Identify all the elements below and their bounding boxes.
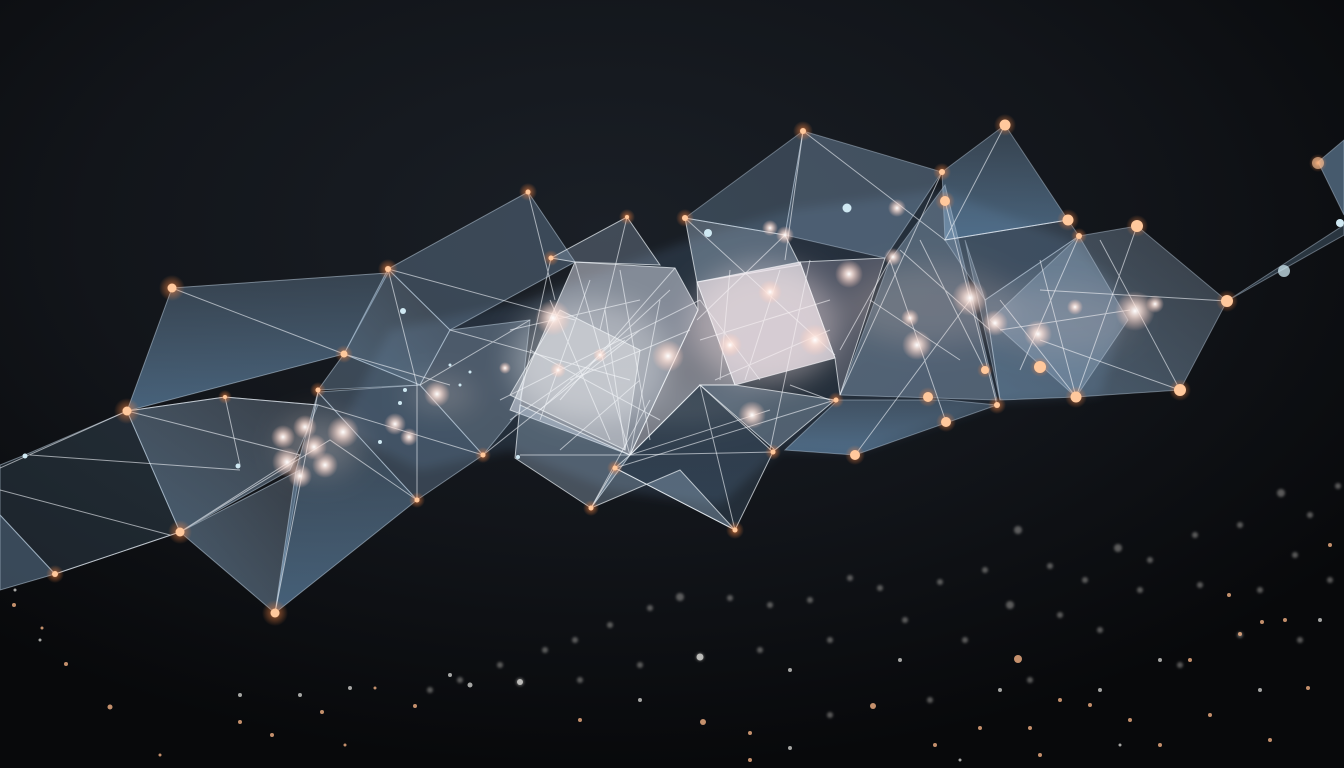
orange glowing nodes [46, 114, 1327, 626]
polygon mesh: right section [685, 125, 1344, 455]
polygon mesh: centre section [510, 217, 885, 530]
bottom particle field [427, 483, 1341, 718]
blurred band underlay [340, 190, 1130, 505]
internal mesh lines [0, 125, 1227, 613]
pale blue nodes [22, 204, 1344, 468]
bottom white particles [14, 588, 1322, 762]
bright white nodes [271, 199, 1164, 488]
soft central glow [280, 265, 1135, 475]
bottom amber particles [12, 543, 1332, 762]
polygon mesh: left section [0, 192, 575, 613]
